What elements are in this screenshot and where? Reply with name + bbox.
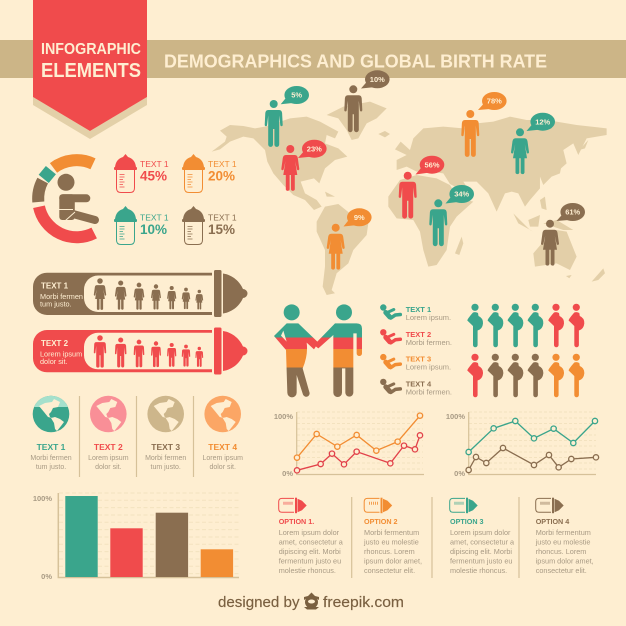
legend row: text 1: TEXT 1 [406, 305, 431, 314]
globe: text 2: TEXT 2 [94, 442, 123, 452]
legend row: text 3: Lorem ipsum. [406, 363, 451, 372]
legend row: text 3: TEXT 3 [406, 355, 431, 364]
person: brown man, 10% [344, 70, 390, 132]
line chart: left [274, 412, 424, 478]
donut with baby icon [38, 160, 95, 237]
stat: bottle brown 15%: 15% [208, 222, 235, 237]
series: orange [294, 413, 423, 460]
stat: bottle orange 20%: 20% [208, 168, 235, 184]
stat: bottle orange 20%: TEXT 1 [208, 159, 237, 169]
ribbon title: INFOGRAPHIC [41, 41, 141, 58]
capsule: text 1 women: Morbi fermen [40, 292, 83, 301]
option 3: fermentum justo eu [450, 556, 512, 566]
option 3: amet, consectetur a [450, 538, 515, 546]
person: brown woman, 61% [541, 203, 585, 266]
line chart: left: 0% [282, 469, 293, 478]
legend row: text 1: Lorem ipsum. [406, 313, 451, 322]
option 4: ipsum dolor amet, [536, 556, 594, 566]
pregnant women pictogram [467, 304, 584, 397]
legend row: text 2 [380, 329, 452, 347]
world map [212, 102, 607, 295]
globe: text 3: TEXT 3 [151, 442, 180, 452]
capsule: text 1 women: tum justo. [40, 300, 72, 308]
series: red [294, 433, 423, 473]
globe: text 1 [30, 395, 72, 471]
globe: text 3: tum justo. [151, 464, 181, 471]
header band [0, 40, 626, 78]
person: brown man, 10%: 10% [370, 75, 385, 84]
legend row: text 4: TEXT 4 [406, 379, 432, 388]
stat: bottle brown 15% [182, 206, 237, 244]
globe: text 2: Lorem ipsum [88, 455, 129, 462]
option 3: OPTION 3 [450, 517, 484, 526]
globe: text 2 [88, 395, 129, 471]
person: teal man, 5% [265, 86, 309, 147]
stat: bottle orange 20% [182, 154, 237, 192]
globe: text 3 [145, 395, 186, 471]
series: brown [466, 445, 599, 473]
person: teal woman, 12%: 12% [535, 117, 551, 126]
legend row: text 3 [380, 354, 451, 372]
legend: baby icons [380, 304, 452, 396]
option 1: molestie rhoncus. [279, 566, 336, 575]
option 4: consectetur elit. [536, 566, 587, 575]
capsule: text 1 women: TEXT 1 [41, 282, 69, 290]
option 2: ipsum dolor amet, [364, 556, 422, 566]
ribbon title [33, 0, 147, 139]
capsule: text 2 men: TEXT 2 [41, 339, 69, 348]
person: red woman, 23% [281, 140, 327, 191]
option 2: Morbi fermentum [364, 528, 419, 537]
option 1: dipiscing elit. Morbi [279, 547, 341, 556]
person: orange man, 78%: 78% [487, 97, 502, 106]
heading: demographics: DEMOGRAPHICS AND GLOBAL BIRTH RATE [164, 52, 547, 72]
globe: text 4 [202, 395, 243, 471]
option 4: Morbi fermentum [536, 528, 591, 537]
person: red man, 56%: 56% [424, 160, 440, 169]
footer credit: designed by [218, 595, 300, 611]
capsule: text 2 men [33, 328, 248, 374]
capsule: text 1 women [33, 270, 248, 317]
option 1: Lorem ipsum dolor [279, 528, 340, 537]
line chart: right: 100% [446, 412, 465, 421]
icon: freepik logo [304, 592, 319, 610]
globe: text 4: TEXT 4 [208, 442, 237, 452]
person: teal man, 34%: 34% [454, 190, 470, 199]
stat: bottle red 45%: 45% [140, 168, 167, 184]
option 4: rhoncus. Lorem [536, 547, 586, 556]
capsule: text 2 men: Lorem ipsum [40, 350, 82, 358]
capsule: text 2 men: dolor sit. [40, 357, 68, 366]
stat: bottle teal 10% [114, 206, 169, 244]
option 3: Lorem ipsum dolor [450, 528, 511, 537]
person: teal man, 5%: 5% [291, 91, 302, 100]
legend row: text 4 [380, 379, 452, 396]
bar chart: 100% [33, 494, 52, 503]
person: teal man, 34% [429, 185, 474, 246]
person: orange woman, 9% [327, 208, 372, 270]
globe: text 3: Morbi fermen [145, 455, 186, 462]
stat: bottle teal 10%: 10% [140, 222, 167, 237]
option 3: molestie rhoncus. [450, 566, 507, 575]
ribbon title: ELEMENTS [41, 60, 141, 82]
footer credit [218, 592, 404, 611]
option 3 [450, 498, 515, 575]
bar chart [33, 493, 239, 581]
person: brown woman, 61%: 61% [565, 208, 581, 217]
globe: text 1: TEXT 1 [37, 442, 66, 452]
option 4 [535, 498, 594, 575]
globe: text 1: Morbi fermen [30, 455, 72, 462]
option 4: OPTION 4 [536, 517, 569, 526]
option 1: fermentum justo eu [279, 556, 341, 566]
option 2: rhoncus. Lorem [364, 547, 415, 556]
option 4: justo eu molestie [535, 538, 590, 546]
option 3: dipiscing elit. Morbi [450, 547, 512, 556]
line chart: right [446, 412, 599, 478]
person: red woman, 23%: 23% [307, 144, 322, 153]
person: orange man, 78% [461, 92, 507, 157]
option 1: amet, consectetur a [279, 538, 344, 546]
globe: text 4: Lorem ipsum [202, 455, 243, 462]
legend row: text 4: Morbi fermen. [406, 387, 452, 396]
option 2: justo eu molestie [363, 538, 419, 546]
legend row: text 2: TEXT 2 [406, 330, 431, 339]
footer credit: freepik.com [323, 595, 404, 611]
stat: bottle teal 10%: TEXT 1 [140, 212, 169, 222]
option 2: consectetur elit. [364, 566, 415, 575]
stat: bottle red 45% [114, 154, 169, 192]
person: teal woman, 12% [511, 113, 555, 174]
option 2 [363, 498, 422, 575]
stat: bottle brown 15%: TEXT 1 [208, 212, 237, 222]
line chart: right: 0% [454, 469, 465, 478]
legend row: text 1 [380, 304, 451, 322]
couple figure [274, 304, 362, 397]
stat: bottle red 45%: TEXT 1 [140, 159, 169, 169]
globe: text 1: tum justo. [36, 464, 66, 471]
bar chart: 0% [41, 572, 52, 581]
legend row: text 2: Morbi fermen. [406, 338, 452, 347]
globe: text 4: dolor sit. [209, 464, 236, 471]
option 2: OPTION 2 [364, 517, 398, 526]
option 1 [279, 498, 344, 575]
line chart: left: 100% [274, 412, 293, 421]
globe: text 2: dolor sit. [95, 464, 122, 471]
person: orange woman, 9%: 9% [354, 213, 365, 222]
person: red man, 56% [399, 156, 444, 219]
series: teal [466, 418, 598, 455]
option 1: OPTION 1. [279, 517, 314, 526]
